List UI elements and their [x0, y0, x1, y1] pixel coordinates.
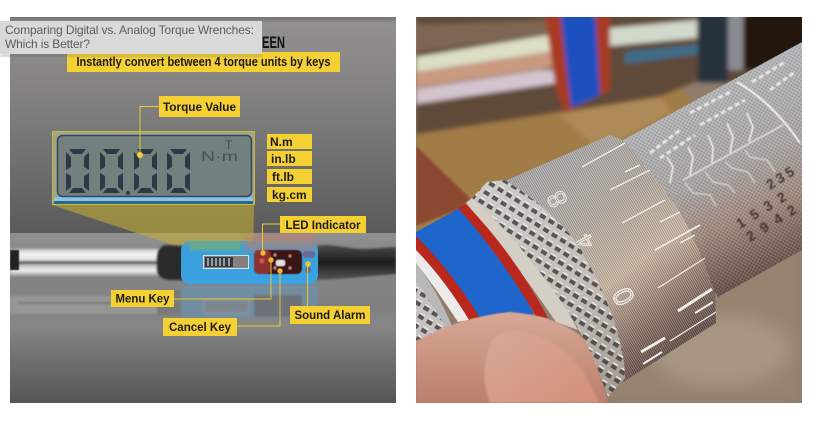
unit label: in.lb: in.lb: [271, 152, 296, 166]
callout: Menu Key: Menu Key: [116, 292, 170, 306]
knurled ring: [472, 180, 625, 397]
wrench shaft: [10, 249, 160, 276]
wrench reflection: [10, 284, 319, 318]
barrel numerals: 2942: [743, 201, 799, 245]
digit: 0: [167, 149, 190, 193]
subtitle banner: Instantly convert between 4 torque units by keys: [76, 54, 330, 69]
callout: Cancel Key: Cancel Key: [169, 320, 231, 334]
callout: Cancel Key: [163, 268, 283, 336]
magnification beam: [52, 205, 254, 247]
wrench handle: [316, 245, 396, 280]
wrench speaker: [303, 251, 315, 273]
callout: LED Indicator: [260, 216, 366, 256]
panel background: [10, 17, 396, 403]
knurl pattern: [472, 180, 625, 397]
unit label: ft.lb: [267, 169, 312, 184]
tooltip: article title: Which is Better?: [5, 37, 90, 51]
brown-silver barrel: [623, 42, 802, 297]
scale numeral: 0: 0: [606, 282, 641, 311]
digit: 0: [134, 149, 157, 193]
scale numeral: 8: 8: [540, 186, 574, 213]
wrench grip: [157, 245, 190, 280]
enlarged LCD display: [52, 132, 254, 204]
thimble scale collar: [505, 135, 716, 382]
callout: Menu Key: [111, 257, 274, 307]
LCD unit: N·m: [201, 148, 238, 164]
barrel grain: [623, 42, 802, 297]
scale numeral: 4: 4: [570, 229, 600, 254]
decimal point: [126, 191, 130, 195]
unit label: ft.lb: ft.lb: [272, 170, 294, 184]
unit label: in.lb: [267, 151, 312, 166]
photo background: [416, 17, 802, 403]
barrel numerals: 1532: [733, 188, 789, 232]
wrench keypad: [254, 250, 302, 274]
chrome edge and red-blue band: [416, 198, 578, 342]
blurred background wrench: [416, 10, 814, 134]
barrel numerals: 235: [763, 163, 797, 193]
unit label: kg.cm: kg.cm: [272, 188, 307, 202]
barrel numerals: [736, 166, 798, 242]
digit: 0: [100, 149, 123, 193]
tooltip: article title: [0, 21, 262, 57]
wrench blue body: [181, 234, 318, 284]
collar fine line texture: [505, 135, 716, 382]
callout: Torque Value: [137, 96, 240, 158]
panel: digital torque wrench screen diagram: [10, 17, 396, 403]
fingertip at left edge: [416, 146, 470, 226]
callout: Sound Alarm: [290, 261, 370, 324]
barrel scale engraving: [650, 62, 800, 206]
tooltip: article title: Comparing Digital vs. Analog Torque Wrenches:: [5, 23, 254, 37]
thimble scale marks: [582, 143, 716, 364]
thumbnail: [484, 330, 600, 403]
subtitle banner: [67, 52, 340, 72]
LCD peak marker: T: [225, 138, 233, 152]
callout: LED Indicator: LED Indicator: [286, 218, 361, 232]
digit: 0: [66, 149, 89, 193]
unit label: N.m: N.m: [270, 135, 293, 149]
callout: Torque Value: Torque Value: [163, 100, 236, 114]
heading fragment: EEN: [262, 33, 285, 52]
unit label: N.m: [267, 134, 312, 149]
panel: analog torque wrench photo: [416, 10, 814, 403]
thumb: [416, 312, 608, 403]
callout: Sound Alarm: Sound Alarm: [294, 308, 366, 322]
wrench mini display: [204, 256, 248, 268]
